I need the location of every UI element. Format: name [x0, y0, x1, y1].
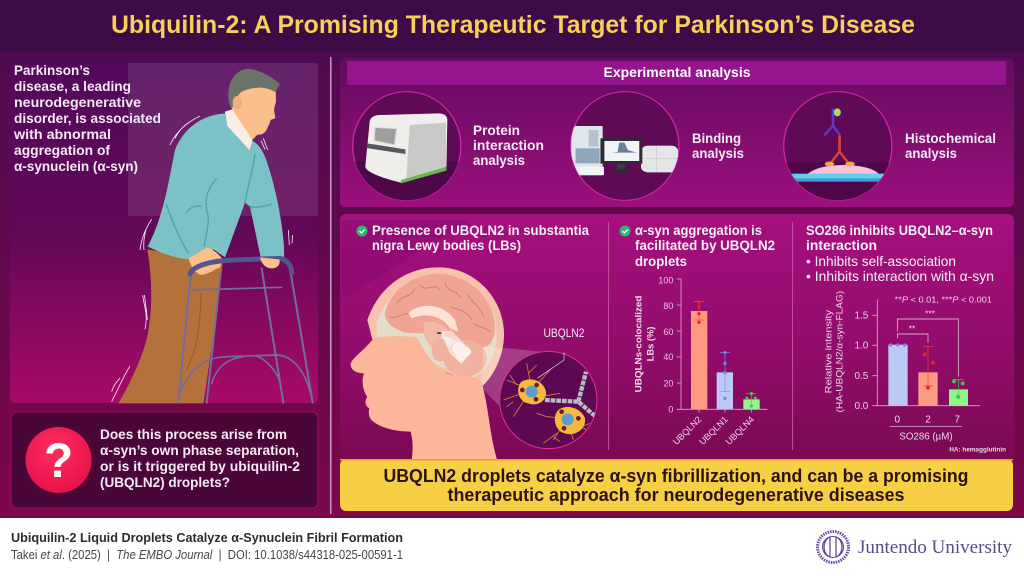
heading: SO286 — [806, 223, 994, 284]
bar chart: UBQLNs-colocalized LBs: 100 — [658, 275, 673, 285]
bar chart: UBQLNs-colocalized LBs: 0 — [668, 404, 673, 414]
label: histochemical — [905, 131, 996, 161]
bar chart: relative intensity vs SO286: 7 — [955, 414, 961, 425]
bar chart: relative intensity vs SO286: ** — [909, 323, 916, 333]
bar chart: relative intensity vs SO286: 1.5 — [854, 311, 869, 322]
label: binding: Binding — [692, 131, 741, 146]
conclusion callout — [340, 459, 1013, 511]
bar chart: UBQLNs-colocalized LBs — [634, 275, 767, 447]
intro text: neurodegenerative — [14, 95, 141, 110]
icon: binding analysis instrument — [571, 92, 679, 200]
heading: SO286: • Inhibits interaction with α-syn — [806, 269, 994, 284]
beam to inset — [482, 346, 545, 412]
citation details: Takei et al. (2025) | The EMBO Journal | DOI: 10.1038/s44318-025-00591-1 — [11, 548, 403, 562]
label: protein interaction — [473, 123, 544, 168]
intro text: Parkinson’s — [14, 63, 90, 78]
bar chart: UBQLNs-colocalized LBs: UBQLNs-colocalized — [634, 295, 644, 392]
label: binding: analysis — [692, 146, 744, 161]
bar chart: relative intensity vs SO286: **P < 0.01, ***P < 0.001 — [895, 295, 992, 305]
bar chart: UBQLNs-colocalized LBs: UBQLN4 — [724, 414, 756, 447]
intro text — [13, 63, 161, 174]
bar chart: UBQLNs-colocalized LBs: UBQLN1 — [697, 414, 730, 447]
footer — [0, 518, 1024, 576]
bar chart: UBQLNs-colocalized LBs: 60 — [663, 327, 673, 337]
conclusion callout: therapeutic approach for neurodegenerative diseases — [448, 485, 904, 505]
heading: aggregation: facilitated by UBQLN2 — [635, 238, 775, 253]
bar chart: relative intensity vs SO286: 1.0 — [854, 341, 869, 352]
heading: aggregation: droplets — [635, 254, 687, 269]
bar chart: UBQLNs-colocalized LBs: 40 — [663, 352, 673, 362]
question text — [100, 427, 300, 490]
heading: aggregation — [620, 223, 775, 269]
panel: research question — [11, 412, 318, 508]
conclusion callout: UBQLN2 droplets catalyze α-syn fibrillization, and can be a promising — [384, 466, 968, 486]
panel: experimental analysis — [340, 58, 1014, 207]
label: protein interaction: interaction — [473, 138, 544, 153]
intro text: disorder, is associated — [14, 111, 161, 126]
question text: Does this process arise from — [100, 427, 287, 442]
heading: Lewy bodies: nigra Lewy bodies (LBs) — [372, 238, 521, 253]
tremor marks — [112, 116, 293, 402]
label: histochemical: analysis — [905, 146, 957, 161]
icon: question mark: ? — [44, 435, 73, 488]
bar chart: UBQLNs-colocalized LBs: LBs (%) — [645, 327, 655, 361]
heading: SO286: SO286 inhibits UBQLN2–α-syn — [806, 223, 993, 238]
bar chart: relative intensity vs SO286: SO286 (µM) — [899, 431, 953, 442]
intro text: aggregation of — [14, 143, 110, 158]
heading: SO286: • Inhibits self-association — [806, 254, 956, 269]
intro text: α-synuclein (α-syn) — [14, 159, 138, 174]
bar chart: relative intensity vs SO286: Relative intensity — [824, 310, 834, 393]
inset: neurons with UBQLN2 — [500, 351, 597, 449]
bar chart: relative intensity vs SO286: HA: hemagglutinin — [949, 447, 1006, 454]
question text: (UBQLN2) droplets? — [100, 475, 230, 490]
walker frame — [178, 258, 313, 403]
bar chart: UBQLNs-colocalized LBs: UBQLN2 — [671, 414, 703, 447]
icon: histochemical antibody staining — [781, 92, 896, 203]
heading: SO286: interaction — [806, 238, 877, 253]
panel: results — [340, 214, 1014, 461]
bar chart: relative intensity vs SO286: (HA-UBQLN2/α-syn-FLAG) — [835, 291, 845, 412]
heading: Lewy bodies: Presence of UBQLN2 in substantia — [372, 223, 589, 238]
question text: α-syn’s own phase separation, — [100, 443, 299, 458]
citation title: Ubiquilin-2 Liquid Droplets Catalyze α-Synuclein Fibril Formation — [11, 531, 403, 545]
intro text: disease, a leading — [14, 79, 131, 94]
heading: aggregation: α-syn aggregation is — [635, 223, 762, 238]
bar chart: relative intensity vs SO286 — [824, 291, 1006, 454]
bar chart: relative intensity vs SO286: 0.0 — [854, 401, 869, 412]
logo: Juntendo University: Juntendo University — [858, 537, 1012, 558]
bar chart: UBQLNs-colocalized LBs: 80 — [663, 301, 673, 311]
illustration: head with brain — [351, 267, 504, 461]
label: protein interaction: analysis — [473, 153, 525, 168]
label: histochemical: Histochemical — [905, 131, 996, 146]
illustration: man with walker — [112, 69, 313, 403]
heading: Lewy bodies — [356, 223, 589, 253]
heading bar: Experimental analysis — [604, 65, 751, 80]
icon: question mark — [26, 427, 92, 493]
bar chart: UBQLNs-colocalized LBs: 20 — [663, 378, 673, 388]
title: Ubiquilin-2: A Promising Therapeutic Target for Parkinson’s Disease — [111, 11, 915, 39]
bar chart: relative intensity vs SO286: *** — [925, 308, 936, 318]
label: UBQLN2: UBQLN2 — [544, 328, 584, 340]
panel: Parkinson's patient — [10, 62, 318, 403]
label: binding — [692, 131, 744, 161]
bar chart: relative intensity vs SO286: 2 — [925, 414, 931, 425]
bar chart: relative intensity vs SO286: 0.5 — [854, 371, 869, 382]
icon: protein interaction instrument — [349, 92, 467, 202]
label: protein interaction: Protein — [473, 123, 520, 138]
heading bar — [347, 61, 1006, 85]
logo: Juntendo University — [818, 532, 1012, 562]
header band with title — [0, 0, 1024, 51]
intro text: with abnormal — [13, 127, 111, 142]
bar chart: relative intensity vs SO286: 0 — [895, 414, 901, 425]
question text: or is it triggered by ubiquilin-2 — [100, 459, 300, 474]
